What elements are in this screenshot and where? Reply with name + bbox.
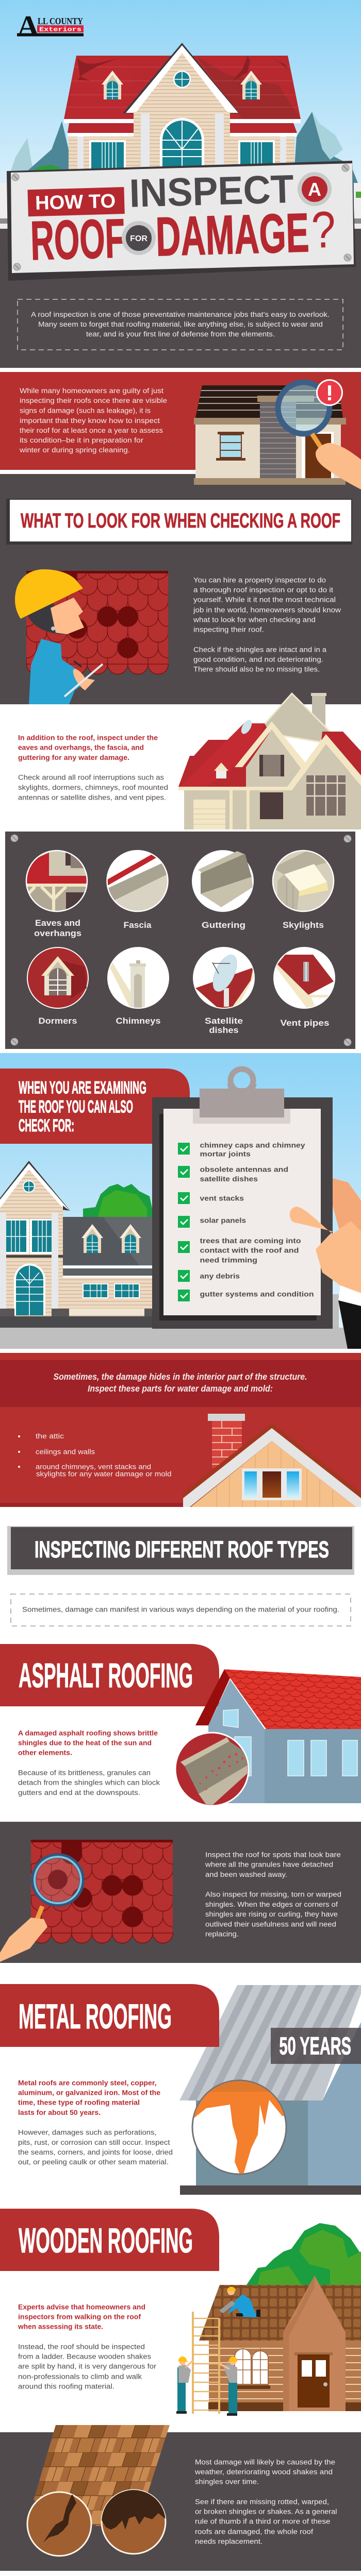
shingle inspection text (205, 1851, 341, 1938)
asphalt text: Because of its brittleness, granules can (18, 1769, 151, 1776)
wooden text: when assessing its state. (18, 2323, 103, 2331)
title text: ROOF (30, 207, 126, 272)
examining heading tab: WHEN YOU ARE EXAMINING (19, 1078, 146, 1097)
red intro text: inspecting their roofs once there are visible (20, 397, 167, 404)
worker at ladder right (219, 2357, 237, 2416)
house (64, 43, 301, 179)
part labels: Vent pipes (281, 1018, 329, 1028)
tree (83, 1184, 152, 1221)
part labels: Chimneys (116, 1016, 161, 1026)
asphalt text (18, 1729, 160, 1797)
part labels: dishes (209, 1025, 238, 1035)
checklist text: vent stacks (200, 1194, 244, 1202)
interior damage banner: Inspect these parts for water damage and mold: (88, 1383, 273, 1394)
asphalt heading tab (0, 1644, 219, 1706)
trees (247, 2223, 361, 2285)
badge A: A (308, 179, 321, 200)
interior bullet list: around chimneys, vent stacks and (36, 1463, 151, 1470)
wood damage text: roofs are damaged, the whole roof (195, 2528, 313, 2536)
satellite dishes (193, 947, 255, 1009)
title text: ? (310, 201, 336, 259)
title text: INSPECT (129, 167, 294, 216)
panel screws (11, 835, 351, 1046)
wood damage text: needs replacement. (195, 2538, 262, 2545)
part labels: Satellite (205, 1016, 243, 1026)
wood damage text: or broken shingles or shakes. As a general (195, 2508, 337, 2515)
title sign (7, 161, 356, 281)
inspector text: Check if the shingles are intact and in a (193, 646, 327, 653)
wooden text: from a ladder. Because wooden shakes (18, 2352, 151, 2361)
title text: HOW TO (35, 191, 116, 214)
fascia (106, 850, 169, 912)
inspector text: good condition, and not deteriorating. (193, 655, 323, 664)
shingle inspection text: where all the granules have detached (205, 1861, 333, 1868)
panel: roof parts (5, 832, 355, 1049)
shingle inspection text: shingles are rising or curling, they have (205, 1910, 338, 1918)
inspector text: You can hire a property inspector to do (193, 576, 326, 584)
interior damage banner: Sometimes, the damage hides in the interior part of the structure. (54, 1371, 307, 1382)
wood damage text: rule of thumb if a third or more of these (195, 2517, 330, 2526)
eaves and overhangs (26, 850, 88, 913)
intro box: tear, and is your first line of defense from the elements. (86, 330, 275, 338)
beige house (178, 693, 361, 829)
red intro text: signs of damage (such as leakage), it is (20, 407, 151, 414)
inspector text: yourself. While it it not the most technical (193, 596, 336, 604)
asphalt house (175, 1669, 361, 1808)
wood damage text: shingles over time. (195, 2478, 259, 2485)
part labels: overhangs (34, 928, 81, 938)
rust close-up (192, 2079, 287, 2175)
checklist text: obsolete antennas and (200, 1165, 288, 1174)
eaves text: skylights, dormers, chimneys, roof mounted (18, 784, 168, 791)
metal text: lasts for about 50 years. (18, 2109, 101, 2116)
road edges (0, 183, 361, 229)
eaves text: Check around all roof interruptions such as (18, 774, 164, 781)
screws (12, 164, 351, 270)
metal text: time, these type of roofing material (18, 2099, 140, 2106)
part labels (34, 918, 329, 1035)
checklist text: trees that are coming into (200, 1237, 301, 1245)
part labels: Eaves and (35, 918, 80, 928)
asphalt text: shingles due to the heat of the sun and (18, 1739, 152, 1747)
wooden text: inspectors from walking on the roof (18, 2313, 141, 2320)
inspector text: a thorough roof inspection or opt to do it (193, 586, 333, 594)
crack close-up (27, 2492, 91, 2556)
years badge (271, 2028, 361, 2064)
examining heading tab (0, 1069, 190, 1144)
magnifier (278, 382, 330, 447)
wood damage text: weather, deteriorating wood shakes and (194, 2468, 333, 2476)
inspector text: what to look for when checking and (193, 616, 316, 623)
inspector text: inspecting their roof. (193, 625, 264, 634)
shingles with inspector (15, 569, 168, 704)
chimneys (107, 947, 169, 1009)
checkbox column (178, 1143, 190, 1301)
wood shake panel (27, 2425, 170, 2556)
rot close-up (101, 2488, 166, 2554)
eaves text: antennas or satellite dishes, and vent pipes. (18, 793, 166, 802)
checklist (178, 1142, 314, 1301)
wooden text: Experts advise that homeowners and (18, 2303, 145, 2311)
asphalt text: A damaged asphalt roofing shows brittle (18, 1729, 158, 1737)
part labels: Guttering (202, 920, 245, 930)
interior bullet list: skylights for any water damage or mold (36, 1470, 171, 1478)
gutter close-up (175, 1733, 249, 1808)
checklist text: satellite dishes (200, 1175, 258, 1183)
logo: Exteriors (39, 26, 81, 33)
shingles with magnifier (0, 1840, 173, 1962)
hand (316, 443, 361, 489)
shingle inspection text: shingles. When the edges or corners of (205, 1901, 338, 1908)
header scene (0, 0, 361, 229)
eaves text (18, 734, 168, 802)
intro box (18, 299, 343, 350)
metal heading tab: METAL ROOFING (19, 1997, 172, 2036)
logo: A (17, 9, 39, 43)
logo: LL COUNTY (38, 16, 83, 26)
heading: inspecting different roof types (7, 1526, 354, 1575)
inspector text: job in the world, homeowners should know (193, 606, 341, 614)
shingle inspection text: Also inspect for missing, torn or warped (205, 1891, 341, 1898)
alert icon (316, 379, 343, 406)
intro box: A roof inspection is one of those preventative maintenance jobs that's easy to overlook. (31, 311, 330, 318)
shingle inspection text: outlived their usefulness and will need (205, 1921, 336, 1928)
asphalt text: detach from the shingles which can block (18, 1778, 160, 1787)
checklist text: mortar joints (200, 1150, 251, 1158)
eaves text: In addition to the roof, inspect under the (18, 734, 158, 742)
interior damage banner (0, 1360, 361, 1407)
badge FOR (122, 221, 156, 255)
part labels: Skylights (283, 920, 324, 930)
eaves text: guttering for any water damage. (18, 754, 129, 761)
examining heading tab: THE ROOF YOU CAN ALSO (19, 1097, 133, 1117)
hand holding clipboard (290, 1178, 361, 1349)
wooden house (176, 2223, 361, 2416)
asphalt heading tab: ASPHALT ROOFING (19, 1656, 193, 1695)
worker at ladder left (176, 2357, 193, 2414)
dashed note: Sometimes, damage can manifest in various ways depending on the material of your roofing. (22, 1605, 339, 1614)
metal text: However, damages such as perforations, (18, 2129, 157, 2136)
checklist text: any debris (200, 1273, 240, 1280)
wooden heading tab: WOODEN ROOFING (19, 2221, 193, 2260)
wood damage text (194, 2459, 337, 2545)
interior bullet list: the attic (36, 1432, 64, 1440)
metal text: aluminum, or galvanized iron. Most of the (18, 2089, 160, 2097)
red intro text: winter or during spring cleaning. (19, 446, 130, 454)
checklist text: need trimming (200, 1256, 257, 1264)
inspector text (193, 576, 341, 673)
checklist text: contact with the roof and (200, 1247, 299, 1254)
guttering (192, 850, 254, 912)
clipboard (152, 1069, 333, 1329)
interior bullet list (18, 1432, 171, 1478)
magnifier (34, 1856, 82, 1919)
metal text: out, or peeling caulk or other seam material. (18, 2158, 169, 2166)
metal text: the seams, corners, and joints for loose, dried (18, 2148, 173, 2156)
mountains (8, 112, 361, 206)
heading: what to look for (6, 499, 352, 545)
intro box: Many seem to forget that roofing material, like anything else, is subject to wear and (38, 320, 323, 328)
red banner house (0, 1414, 361, 1507)
vent pipes (273, 947, 335, 1009)
red intro text: While many homeowners are guilty of just (20, 387, 163, 395)
interior bullet list: ceilings and walls (36, 1448, 95, 1456)
badge FOR: FOR (130, 234, 147, 243)
house with magnifier (194, 379, 361, 489)
badge A (298, 172, 332, 206)
neighbourhood house (0, 1161, 152, 1328)
bush (34, 165, 61, 178)
skylights (272, 850, 334, 912)
checklist text (200, 1142, 314, 1298)
wooden text: non-professionals to climb and walk (18, 2373, 142, 2380)
inspector (15, 569, 103, 704)
dashed note (11, 1594, 351, 1626)
asphalt text: other elements. (18, 1749, 72, 1757)
metal text: pits, rust, or corrosion can still occur. Inspect (18, 2139, 170, 2146)
wooden text: Instead, the roof should be inspected (18, 2343, 145, 2350)
red intro text: their roof for at least once a year to assess (20, 427, 163, 434)
wood damage text: See if there are missing rotted, warped, (195, 2498, 329, 2506)
wooden text (18, 2303, 157, 2391)
inspector text: There should also be no missing tiles. (193, 666, 320, 673)
metal text: Metal roofs are commonly steel, copper, (18, 2079, 157, 2087)
shingle inspection text: replacing. (205, 1930, 239, 1938)
asphalt text: gutters and end at the downspouts. (18, 1789, 140, 1797)
part labels: Dormers (38, 1016, 77, 1026)
red intro text: its condition–be it in preparation for (20, 436, 144, 444)
worker on roof (219, 2286, 260, 2317)
examining heading tab: CHECK FOR: (19, 1116, 74, 1136)
red intro text (19, 387, 167, 454)
metal heading tab (0, 1984, 219, 2047)
eaves text: eaves and overhangs, the fascia, and (18, 744, 144, 751)
shingle inspection text: and been washed away. (205, 1871, 287, 1878)
checklist text: solar panels (200, 1217, 246, 1224)
check marks (180, 1146, 188, 1298)
ladder (193, 2312, 219, 2414)
dormers (27, 947, 89, 1009)
logo (17, 9, 84, 43)
wooden heading tab (0, 2209, 219, 2271)
metal house (179, 1985, 361, 2195)
hand (0, 1918, 47, 1962)
wooden text: are split by hand, it is very dangerous for (18, 2363, 157, 2370)
red intro text: important that they know how to inspect (20, 417, 160, 425)
part labels: Fascia (124, 920, 152, 930)
wood damage text: Most damage will likely be caused by the (195, 2459, 335, 2466)
title text (27, 166, 337, 272)
metal text (18, 2079, 173, 2166)
shingle inspection text: Inspect the roof for spots that look bare (205, 1851, 341, 1859)
checklist text: chimney caps and chimney (200, 1142, 305, 1149)
wooden text: around this roofing material. (18, 2382, 114, 2391)
checklist text: gutter systems and condition (200, 1290, 314, 1298)
